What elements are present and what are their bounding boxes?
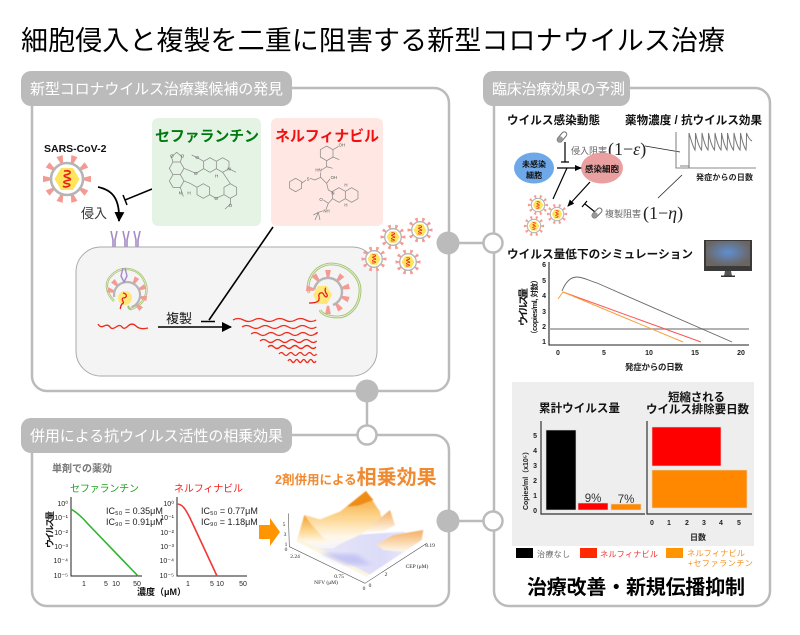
bar chart: shortened days: 4 [719,520,723,527]
molecule: cepharanthine: O [214,196,218,201]
inhibition: cepharanthine blocks entry [123,189,152,205]
molecule: nelfinavir: N [331,190,334,195]
line: virus joins infection [553,168,567,199]
molecule: nelfinavir: H [344,183,347,188]
chart: 3D synergy surface: 2 [385,572,388,578]
chart: nelfinavir dose response: 5 [210,581,214,588]
heading: clinical prediction [483,71,630,106]
inhibition: replication [582,201,595,212]
molecule: cepharanthine: O [194,171,198,176]
chart: nelfinavir dose response [160,497,258,588]
panel: cepharanthine [152,118,261,226]
icons: released viruses [362,218,432,274]
heading: combination: 併用による抗ウイルス活性の相乗効果 [30,428,283,445]
chart: viral load simulation [518,262,749,372]
arrow: replication [158,326,231,328]
label: replication inhibition: 複製阻害 [605,208,641,219]
arrow: entry [98,187,119,221]
heading: synergy: 2剤併用による相乗効果 [275,466,437,489]
chart: cepharanthine dose response: 10⁻⁵ [54,573,68,580]
bar chart: shortened days [646,390,752,542]
bar chart: cumulative viral load: 9% [585,493,601,505]
chart: nelfinavir dose response: 1 [186,581,190,588]
molecule: nelfinavir: S [307,177,310,182]
chart: cepharanthine dose response: IC₅₀ = 0.35μM [106,506,163,516]
panel: cepharanthine: セファランチン [155,128,259,145]
chart: cepharanthine dose response: 50 [133,581,141,588]
chart: viral load simulation: 2 [542,324,546,331]
heading: drug discovery [21,71,292,106]
icon: pill entry [556,131,568,143]
endosome: entry [107,268,147,311]
chart: 3D synergy surface: 2.24 [290,554,300,560]
chart: nelfinavir dose response: 10⁻² [160,530,175,537]
chart: viral load simulation: 10 [645,350,653,357]
label: entry inhibition: 侵入阻害 [571,145,607,156]
chart: viral load simulation: 6 [542,262,546,269]
bar chart: shortened days: 短縮される [668,390,725,404]
chart: cepharanthine dose response [54,497,163,588]
molecule: cepharanthine [169,152,237,209]
label: entry: 侵入 [81,206,107,221]
chart: 3D synergy surface [283,491,435,592]
chart: 3D synergy surface: 0 [285,547,288,553]
chart: 3D synergy surface: CEP (μM) [406,563,429,570]
panel: drug discovery [21,71,449,391]
inhibition: nelfinavir blocks replication [201,227,273,322]
arrow: infection [557,167,581,169]
chart: 3D synergy surface: 5 [283,522,286,528]
endosome: release [306,264,360,317]
bar chart: cumulative viral load [522,401,645,515]
bar chart: cumulative viral load: Copies/ml（x10⁵） [522,448,530,510]
chart: cepharanthine dose response: 10⁻² [54,530,69,537]
conclusion: 治療改善・新規伝播抑制 [527,576,745,599]
molecule: cepharanthine: O [229,203,233,208]
bar chart: cumulative viral load: 5 [533,433,537,440]
chart: cepharanthine dose response: 10⁻⁴ [54,558,68,565]
chart: viral load simulation: 4 [542,293,546,300]
line: entry to chart [645,146,680,152]
chart: 3D synergy surface: 0 [369,583,372,589]
panel: nelfinavir [271,118,383,226]
legend: ネルフィナビル [687,549,745,558]
chart: viral load simulation: 0 [556,350,560,357]
bar chart: cumulative viral load: 7% [618,494,634,506]
chart: nelfinavir dose response: 50 [239,581,247,588]
chart: 3D synergy surface: 8.19 [425,543,435,549]
molecule: nelfinavir: OH [331,175,337,180]
axis label: concentration: 濃度（μM） [137,586,186,597]
chart: nelfinavir dose response: 10 [216,581,224,588]
cell: infected [581,152,623,184]
label: nelfinavir: ネルフィナビル [174,483,243,495]
bar chart: cumulative viral load: 1 [533,493,537,500]
cell: uninfected: 細胞 [526,170,542,180]
chart: viral load simulation: ウイルス量 [518,288,530,326]
chart: drug concentration [676,132,756,182]
legend: ネルフィナビル [600,550,658,559]
chart: nelfinavir dose response: 10⁻⁵ [160,573,174,580]
label: SARS-CoV-2: SARS-CoV-2 [44,143,107,155]
formula: replication: (1−η) [643,203,683,224]
chart: nelfinavir dose response: 10⁰ [163,500,174,508]
host cell [76,247,377,376]
chart: 3D synergy surface: 3 [284,532,287,538]
chart: viral load simulation: 5 [542,278,546,285]
bar chart: cumulative viral load: 4 [533,448,537,455]
bar chart: shortened days: 5 [737,520,741,527]
molecule: nelfinavir: NH [323,208,330,213]
icon: large virus [43,155,91,203]
RNA: single strand [98,324,148,329]
molecule: nelfinavir [290,143,358,220]
bar chart: shortened days: 0 [650,520,654,527]
chart: viral load simulation: 5 [602,350,606,357]
icons: small viruses [524,195,567,236]
chart: nelfinavir dose response: 10⁻³ [160,544,175,551]
formula: entry: (1−ε) [608,139,646,160]
molecule: cepharanthine: N [227,167,231,172]
bar chart: shortened days: 日数 [690,532,706,542]
panel: combination effect [21,418,449,606]
molecule: cepharanthine: O [195,155,199,160]
chart: cepharanthine dose response: 1 [82,581,86,588]
arrow: virus production [568,182,590,206]
chart: viral load simulation: （copies/ml, 対数） [529,276,539,338]
cell: uninfected: 未感染 [522,159,546,169]
bar chart: cumulative viral load: 2 [533,478,537,485]
RNA: replicated strands [233,318,317,362]
heading: clinical prediction: 臨床治療効果の予測 [492,81,625,98]
chart: nelfinavir dose response: 10⁻¹ [160,515,175,522]
label: replication: 複製 [166,311,192,326]
molecule: nelfinavir: OH [339,143,345,148]
bar chart: cumulative viral load: 3 [533,463,537,470]
icon: pill replication [591,207,603,219]
chart: cepharanthine dose response: 10⁻³ [54,544,69,551]
chart: nelfinavir dose response: 10⁻⁴ [160,558,174,565]
molecule: nelfinavir: H [344,203,347,208]
chart: nelfinavir dose response: IC₅₀ = 0.77μM [201,506,258,516]
molecule: cepharanthine: H [215,174,218,179]
chart: cepharanthine dose response: 10⁰ [57,500,68,508]
molecule: cepharanthine: H [187,190,191,195]
bar chart: shortened days: ウイルス排除要日数 [646,402,750,416]
subheading: drug concentration: 薬物濃度 / 抗ウイルス効果 [625,113,762,127]
chart: 3D synergy surface: 1 [285,542,288,548]
molecule: nelfinavir: HN [315,168,322,173]
bar chart: cumulative viral load: 累計ウイルス量 [539,401,620,415]
molecule: cepharanthine: O [170,154,174,159]
chart: 3D synergy surface: 0.75 [334,574,344,580]
heading: drug discovery: 新型コロナウイルス治療薬候補の発見 [30,81,283,98]
chart: 3D synergy surface: NFV (μM) [314,579,338,586]
chart: cepharanthine dose response: 10⁻¹ [54,515,69,522]
chart: viral load simulation: 1 [542,339,546,346]
chart: cepharanthine dose response: 5 [104,581,108,588]
title: 細胞侵入と複製を二重に阻害する新型コロナウイルス治療 [21,26,725,56]
connector: B to C [436,510,502,532]
molecule: cepharanthine: O [181,154,185,159]
molecule: cepharanthine: N [179,190,182,195]
label: single agent: 単剤での薬効 [52,462,112,475]
legend: 治療なし [537,549,570,559]
axis label: viral load: ウイルス量 [45,511,55,548]
chart: cepharanthine dose response: 10 [112,581,120,588]
chart: 3D synergy surface: 0 [363,586,366,592]
subheading: simulation: ウイルス量低下のシミュレーション [507,247,693,261]
legend [516,548,753,568]
cell: uninfected [514,152,554,184]
chart: drug concentration: 発症からの日数 [696,172,753,182]
receptors [111,231,140,247]
panel: clinical prediction [483,71,770,606]
bar chart: shortened days: 1 [667,520,671,527]
connector: A to C [436,232,502,254]
bar chart: shortened days: 2 [685,520,689,527]
chart: viral load simulation: 発症からの日数 [625,362,683,372]
bar chart: shortened days: 3 [702,520,706,527]
arrow: orange [259,518,280,546]
inhibition: entry [561,142,569,162]
line: replication to chart [658,175,682,198]
heading: combination [21,418,292,453]
panel: nelfinavir: ネルフィナビル [275,127,379,145]
legend: +セファランチン [688,559,753,568]
label: cepharanthine: セファランチン [70,483,139,495]
molecule: nelfinavir: O [319,197,323,202]
chart: cepharanthine dose response: IC₉₀ = 0.91μM [106,517,163,527]
subheading: infection dynamics: ウイルス感染動態 [507,113,600,127]
chart: viral load simulation: 20 [737,350,745,357]
chart: viral load simulation: 3 [542,309,546,316]
panel: bar charts [512,382,754,546]
chart: viral load simulation: 15 [691,350,699,357]
bar chart: cumulative viral load: 0 [533,508,537,515]
chart: nelfinavir dose response: IC₉₀ = 1.18μM [201,517,258,527]
icon: monitor [704,240,752,277]
cell: infected: 感染細胞 [585,164,619,174]
connector: A to B [356,380,378,444]
